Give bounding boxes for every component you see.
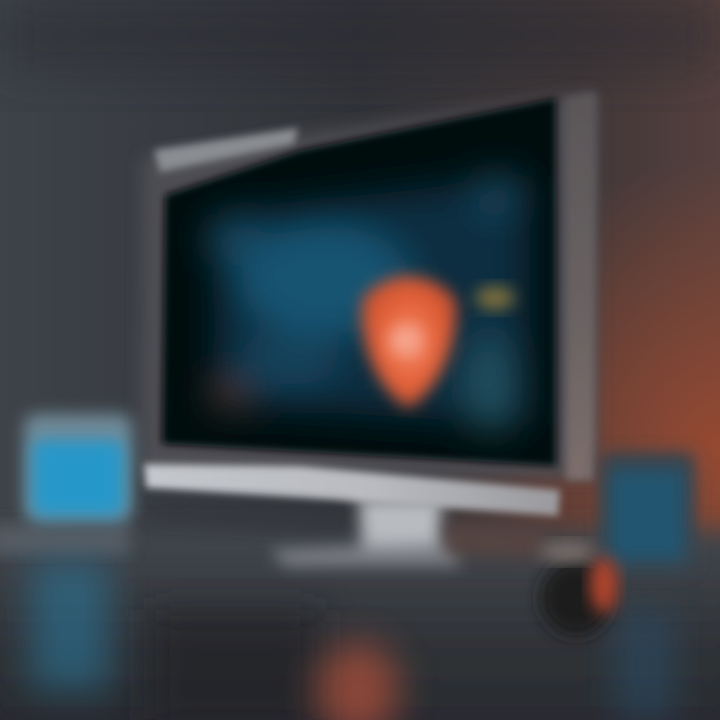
monitor back frame — [140, 92, 596, 478]
desk-side brown shadow — [445, 520, 545, 560]
monitor — [140, 92, 596, 566]
monitor top bezel highlight — [154, 128, 298, 172]
monitor chin — [144, 464, 560, 516]
desk reflections — [30, 560, 675, 720]
screen blue glow — [205, 171, 530, 435]
monitor right bezel — [566, 92, 596, 480]
right blue cup — [600, 452, 695, 574]
monitor stand — [270, 498, 462, 566]
left blue cup — [24, 414, 132, 522]
small yellow icon — [475, 286, 515, 310]
monitor screen — [162, 98, 556, 466]
reflective desk surface — [0, 525, 720, 720]
security shield — [361, 276, 457, 408]
computer mouse — [540, 542, 618, 636]
chin shadow — [150, 497, 345, 532]
